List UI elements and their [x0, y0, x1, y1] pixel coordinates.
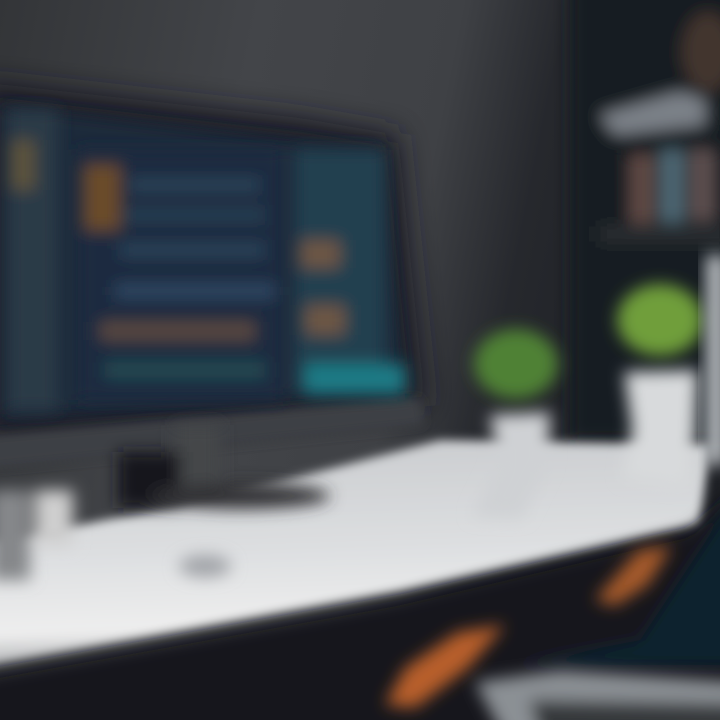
- chair base: [475, 670, 720, 720]
- pot: [622, 370, 698, 488]
- leaves: [617, 284, 703, 356]
- left plant: [472, 329, 558, 518]
- keyboard and mouse: [0, 490, 231, 580]
- pot: [472, 412, 550, 518]
- screen contents: [8, 110, 405, 410]
- computer monitor: [0, 82, 425, 470]
- monitor lower bezel: [0, 398, 424, 470]
- desk surface: [0, 440, 710, 668]
- monitor stand: [118, 425, 330, 509]
- leaves: [474, 329, 558, 399]
- monitor body: [0, 82, 425, 450]
- person at right edge: [706, 255, 720, 465]
- right plant: [617, 284, 703, 488]
- monitor screen: [0, 105, 405, 420]
- shelf unit: dark right side: [570, 0, 720, 440]
- underside of desk: [0, 490, 720, 720]
- orange chair accents: [385, 546, 672, 708]
